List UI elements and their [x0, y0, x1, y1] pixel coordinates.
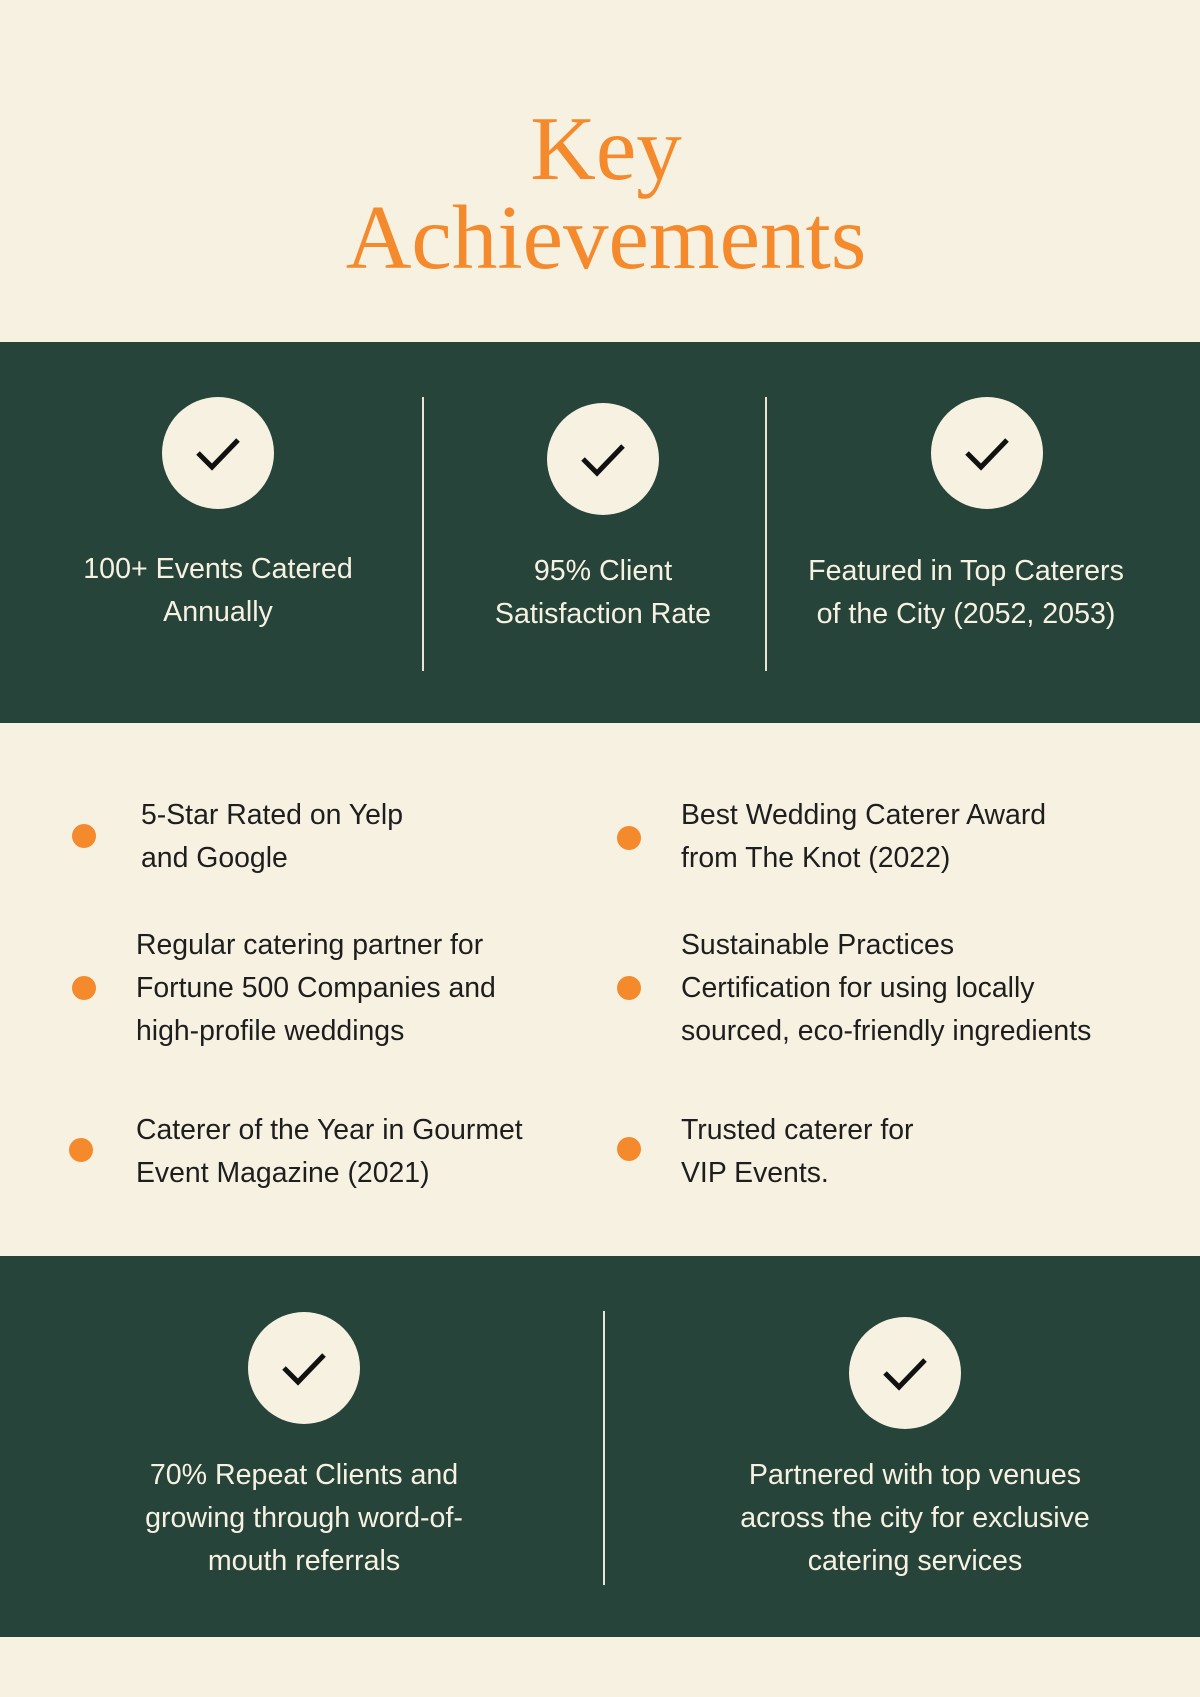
bullet 1	[72, 799, 403, 874]
bullet 6: VIP Events.	[681, 1157, 829, 1189]
text: satisfaction: 95% Client	[534, 555, 672, 587]
text: repeat clients	[145, 1459, 463, 1577]
bullet 4: Sustainable Practices	[681, 929, 954, 961]
bullet 2: Best Wedding Caterer Award	[681, 799, 1046, 831]
text: featured: Featured in Top Caterers	[808, 555, 1124, 587]
text: featured: of the City (2052, 2053)	[817, 598, 1115, 630]
bullet list	[69, 799, 1091, 1189]
bullet 4: Certification for using locally	[681, 972, 1034, 1004]
title: Key	[530, 98, 682, 199]
bullet 3: high-profile weddings	[136, 1015, 404, 1047]
panel: bottom achievements	[0, 1256, 1200, 1637]
icon: check 5	[849, 1317, 961, 1429]
bullet 6	[617, 1114, 913, 1189]
icon: check 2	[547, 403, 659, 515]
bullet 1: and Google	[141, 842, 288, 874]
icon: check 4	[248, 1312, 360, 1424]
icon: check 1	[162, 397, 274, 509]
title	[346, 98, 866, 288]
text: repeat clients: mouth referrals	[208, 1545, 400, 1577]
text: satisfaction	[495, 555, 711, 630]
bullet 5	[69, 1114, 523, 1189]
bullet 2: from The Knot (2022)	[681, 842, 950, 874]
text: featured	[808, 555, 1124, 630]
bullet 4	[617, 929, 1091, 1047]
bullet 5: Caterer of the Year in Gourmet	[136, 1114, 523, 1146]
title: Achievements	[346, 187, 866, 288]
bullet 4: sourced, eco-friendly ingredients	[681, 1015, 1091, 1047]
text: venues: Partnered with top venues	[749, 1459, 1081, 1491]
bullet 6: Trusted caterer for	[681, 1114, 913, 1146]
text: venues: catering services	[808, 1545, 1022, 1577]
bullet 1: 5-Star Rated on Yelp	[141, 799, 403, 831]
text: repeat clients: growing through word-of-	[145, 1502, 463, 1534]
bullet 3: Regular catering partner for	[136, 929, 483, 961]
text: events: 100+ Events Catered	[83, 553, 353, 585]
text: venues: across the city for exclusive	[740, 1502, 1090, 1534]
panel: top achievements	[0, 342, 1200, 723]
bullet 2	[617, 799, 1046, 874]
text: venues	[740, 1459, 1090, 1577]
text: satisfaction: Satisfaction Rate	[495, 598, 711, 630]
bullet 5: Event Magazine (2021)	[136, 1157, 430, 1189]
text: events: Annually	[163, 596, 273, 628]
bullet 3: Fortune 500 Companies and	[136, 972, 496, 1004]
bullet 3	[72, 929, 496, 1047]
icon: check 3	[931, 397, 1043, 509]
text: events	[83, 553, 353, 628]
text: repeat clients: 70% Repeat Clients and	[150, 1459, 458, 1491]
